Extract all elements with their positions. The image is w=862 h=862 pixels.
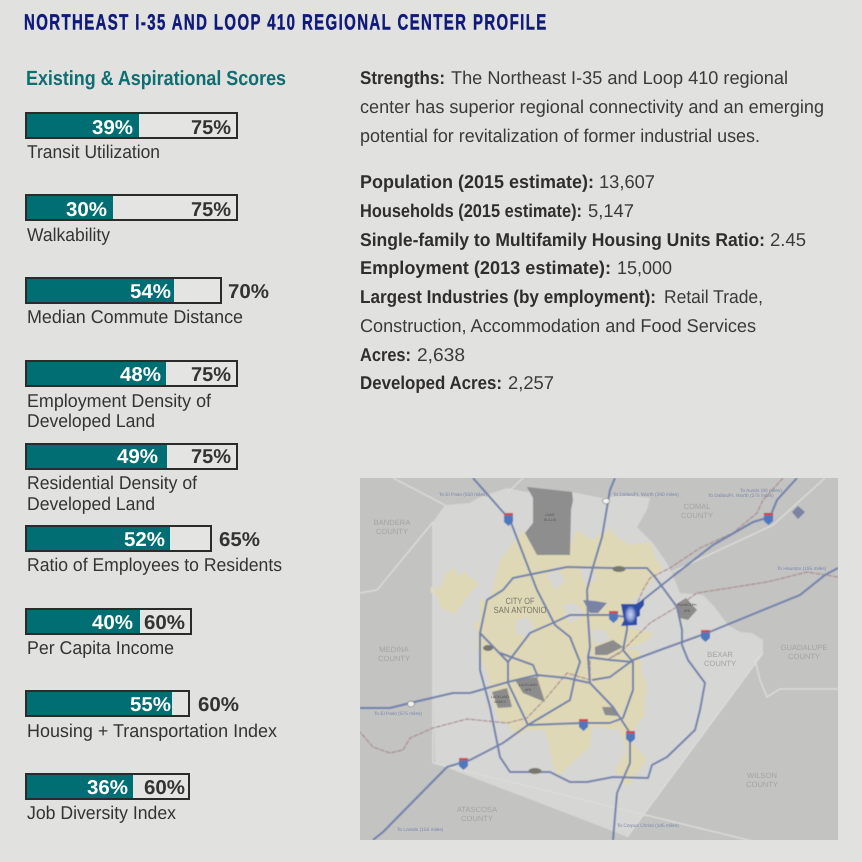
map: Fort Sam Houston xyxy=(595,640,623,655)
map: base labels: LACKLAND xyxy=(519,683,538,687)
map: destination labels: To Austin (80 miles) xyxy=(740,488,782,494)
map: destination labels: To El Paso (550 miles) xyxy=(439,492,487,498)
score bar: median commute distance: Median Commute Distance xyxy=(27,306,243,327)
map: destination labels: To Corpus Christi (145 miles) xyxy=(617,823,679,829)
text block: strengths: center has superior regional connectivity and an emerging xyxy=(360,96,824,117)
map of San Antonio region xyxy=(360,478,838,862)
text block: regional center statistics: Largest Industries (by employment): xyxy=(360,286,656,307)
text block: regional center statistics: Households (2015 estimate): xyxy=(360,200,582,221)
map: area shape near airport xyxy=(583,600,607,613)
map: destination labels xyxy=(374,488,827,833)
score bar: ratio of employees to residents: 65% xyxy=(219,529,260,551)
score bar: housing and transportation index: Housing + Transportation Index xyxy=(27,720,278,741)
text block: regional center statistics: Employment (2013 estimate): xyxy=(360,257,611,278)
score bar: employment density of developed land xyxy=(26,361,237,431)
map: Seguin-side area marker xyxy=(792,506,805,519)
score bar: employment density of developed land: Developed Land xyxy=(27,410,155,431)
map: Brooks xyxy=(602,707,618,716)
map: county labels: COUNTY xyxy=(461,814,493,823)
score bar: residential density of developed land: 75% xyxy=(191,446,231,468)
map: county labels: COUNTY xyxy=(788,652,820,661)
map: holes in city limits xyxy=(450,558,610,750)
text block: regional center statistics: 2.45 xyxy=(770,229,806,250)
text block: strengths: Strengths: xyxy=(360,67,445,88)
map: Lackland air force base xyxy=(515,677,545,702)
score bar: per capita income: 40% xyxy=(92,612,133,634)
score bar: transit utilization: Transit Utilization xyxy=(27,141,160,162)
text block: strengths: potential for revitalization of former industrial uses. xyxy=(360,125,760,146)
map: county labels: BEXAR xyxy=(707,650,733,659)
map: county labels: COUNTY xyxy=(681,511,713,520)
text block: strengths: The Northeast I-35 and Loop 410 regional xyxy=(451,67,788,88)
map: destination labels: To Dallas/Ft. Worth (290 miles) xyxy=(613,492,679,498)
map: county labels: GUADALUPE xyxy=(781,643,827,652)
text block: regional center statistics: Construction, Accommodation and Food Services xyxy=(360,315,756,336)
map: Camp Bullis xyxy=(525,487,573,555)
score bar: employment density of developed land: 75% xyxy=(191,364,231,386)
text block: regional center statistics xyxy=(360,171,806,393)
map: base labels: RANDOLPH xyxy=(678,603,697,607)
score bar: walkability: 30% xyxy=(66,199,107,221)
map: county labels xyxy=(374,502,827,823)
map: county labels: COUNTY xyxy=(746,780,778,789)
score bar: ratio of employees to residents: Ratio of Employees to Residents xyxy=(27,554,282,575)
map: highways xyxy=(480,567,705,782)
score bar: transit utilization: 75% xyxy=(191,117,231,139)
text block: regional center statistics: Developed Acres: xyxy=(360,372,502,393)
map: city label: SAN ANTONIO xyxy=(494,605,546,615)
score bar: residential density of developed land: Residential Density of xyxy=(27,472,198,493)
map: destination labels: To Dallas/Ft. Worth (275 miles) xyxy=(708,493,774,499)
map: highlighted regional center xyxy=(621,599,644,626)
map: Bexar County area xyxy=(433,488,763,837)
map: county labels: MEDINA xyxy=(379,645,410,654)
map: Randolph air force base xyxy=(675,598,697,620)
map: loop and highway badges xyxy=(408,498,626,774)
map: western annexed tan area xyxy=(430,563,480,614)
score bar: walkability: Walkability xyxy=(27,224,111,245)
text block: regional center statistics: 15,000 xyxy=(617,257,672,278)
score bar: employment density of developed land: 48% xyxy=(120,364,161,386)
map: base labels: BULLIS xyxy=(544,518,557,522)
map: county labels: ATASCOSA xyxy=(457,805,498,814)
score bar: median commute distance xyxy=(26,278,269,327)
heading: existing and aspirational scores: Existing & Aspirational Scores xyxy=(26,67,286,90)
text block: strengths xyxy=(360,67,824,146)
score bar: housing and transportation index: 60% xyxy=(198,694,239,716)
score bar: transit utilization xyxy=(26,113,237,162)
score bar: employment density of developed land: Employment Density of xyxy=(27,390,212,411)
score bar: transit utilization: 39% xyxy=(92,117,133,139)
text block: regional center statistics: 13,607 xyxy=(599,171,655,192)
map: county labels: WILSON xyxy=(747,771,777,780)
map: destination labels: To Laredo (155 miles) xyxy=(397,827,444,833)
score bar: residential density of developed land xyxy=(26,444,237,514)
map: county labels: COUNTY xyxy=(378,654,410,663)
map: destination labels: To Houston (195 miles) xyxy=(777,566,827,572)
map: county boundary lines xyxy=(360,478,838,862)
score bar: residential density of developed land: 49% xyxy=(117,446,158,468)
map: city label xyxy=(494,598,546,614)
text block: regional center statistics: Single-family to Multifamily Housing Units Ratio: xyxy=(360,229,765,250)
score bar: median commute distance: 54% xyxy=(130,281,171,303)
map: City of San Antonio area xyxy=(473,528,663,787)
map: county labels: COUNTY xyxy=(704,659,736,668)
map: rail lines xyxy=(360,478,838,753)
score bar: job diversity index xyxy=(26,774,189,823)
score bar: ratio of employees to residents: 52% xyxy=(124,529,165,551)
text block: regional center statistics: Acres: xyxy=(360,344,411,365)
text block: regional center statistics: 2,257 xyxy=(508,372,554,393)
score bar: housing and transportation index xyxy=(26,691,278,741)
map: county labels: COMAL xyxy=(683,502,711,511)
map: destination labels: To El Paso (575 miles) xyxy=(374,711,422,717)
map: base labels: AFB xyxy=(525,688,532,692)
map: base labels: CAMP xyxy=(545,513,556,517)
score bar: ratio of employees to residents xyxy=(26,526,282,575)
text block: regional center statistics: 5,147 xyxy=(588,200,634,221)
score bar: walkability: 75% xyxy=(191,199,231,221)
map: interstate shields xyxy=(459,513,773,770)
score bar: job diversity index: 60% xyxy=(144,777,185,799)
score bar: per capita income: Per Capita Income xyxy=(27,637,174,658)
title: NORTHEAST I-35 AND LOOP 410 REGIONAL CENTER PROFILE xyxy=(24,10,546,34)
score bar: median commute distance: 70% xyxy=(228,281,269,303)
map: base labels: LACKLAND xyxy=(491,695,510,699)
score bar: per capita income xyxy=(26,609,191,658)
text block: regional center statistics: 2,638 xyxy=(417,344,465,365)
score bar: housing and transportation index: 55% xyxy=(130,694,171,716)
score bar: per capita income: 60% xyxy=(144,612,185,634)
map: base labels: ANNEX xyxy=(494,700,507,704)
map: Lackland annex xyxy=(492,688,512,708)
score bar: walkability xyxy=(26,195,237,245)
score bar: job diversity index: Job Diversity Index xyxy=(27,802,177,823)
map: city label: CITY OF xyxy=(506,596,535,606)
text block: regional center statistics: Retail Trade, xyxy=(664,286,763,307)
map: base labels xyxy=(491,513,697,704)
map: county labels: COUNTY xyxy=(376,527,408,536)
map: county labels: BANDERA xyxy=(374,518,411,527)
text block: regional center statistics: Population (2015 estimate): xyxy=(360,171,594,192)
score bar: job diversity index: 36% xyxy=(87,777,128,799)
map: base labels: AFB xyxy=(684,609,691,613)
score bar: residential density of developed land: Developed Land xyxy=(27,493,155,514)
